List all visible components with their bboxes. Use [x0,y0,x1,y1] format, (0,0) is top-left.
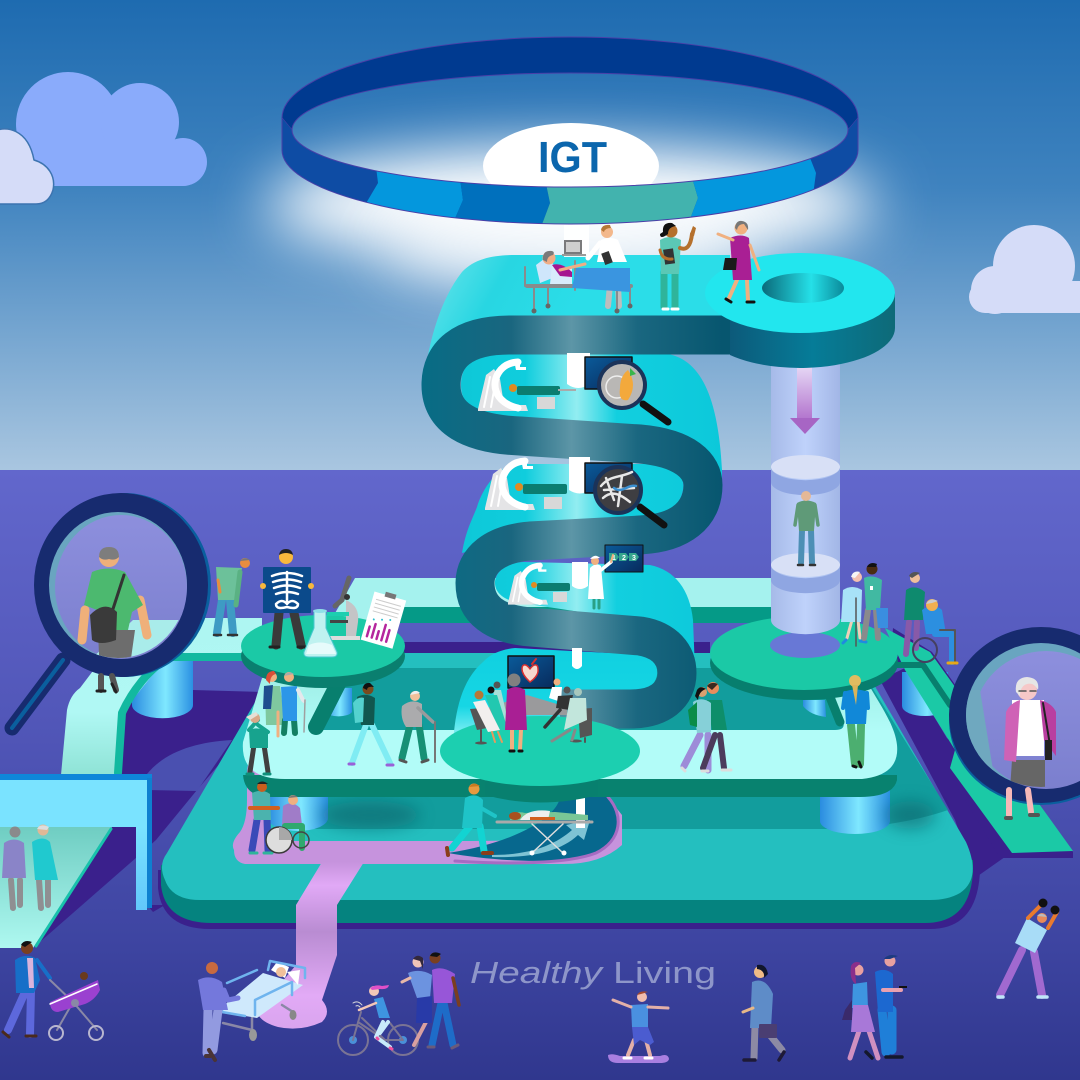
floor level 2 [462,464,683,553]
ramp [0,827,112,948]
man with chest x-ray [260,549,314,647]
right ramp walkway [885,628,1073,858]
girl on bicycle [338,985,418,1055]
nurse running with stretcher [447,784,592,856]
elevator tube [771,355,840,634]
elevator opening [762,273,844,303]
bent man with back pain [214,558,250,635]
carer with elderly woman [841,563,888,646]
doctor pointing at monitor [588,555,613,608]
left disc platform [241,615,405,688]
arrow down [790,418,820,434]
base platform [161,653,973,923]
IGT label: IGT [538,133,607,182]
elderly man with cane [400,691,435,762]
left lens with man [34,493,211,680]
wheelchair man [913,599,957,664]
ribbon wall [441,335,735,709]
flask [304,609,337,657]
spiral ramp [425,225,735,745]
IGT label [483,123,659,209]
ring front band with chevrons [282,118,858,224]
gate frame [0,774,152,780]
carer [864,563,888,638]
C-arm scanner level 1 [478,360,576,411]
doctor [588,225,627,306]
monitor with numbered steps: 1 [612,555,616,562]
monitor with numbered steps: 3 [632,555,636,562]
Healthy Living text [470,955,716,990]
lighter ground patch [147,740,232,791]
stroller [49,972,103,1040]
cloud: upper left large [15,72,207,186]
floor level 1 [461,353,722,490]
clipboard with chart [361,589,407,649]
dark teal arrival area [448,797,618,861]
wheelchair patient [266,795,309,853]
blonde woman from behind [843,675,868,767]
purple horizontal route [233,738,622,864]
boy on skateboard [608,991,669,1063]
elderly woman [841,572,866,646]
back walkway strip [330,578,780,623]
ring back band [282,37,858,130]
light beams [564,225,590,669]
monitor and magnifier level 1 [585,357,668,422]
couple with phone [402,952,459,1048]
column: lower right [820,790,890,834]
arrow on floor [492,820,590,857]
meeting table group [470,674,592,751]
sheet [572,268,630,292]
left bridge with column [61,618,262,775]
lower purple route to bed [257,862,364,1029]
monitor [562,240,586,290]
left lens man's legs below lens [97,676,116,692]
seated clinicians right [545,678,587,741]
cloud: right [969,225,1080,314]
man pushing hospital bed [198,961,305,1060]
glow around ring [265,147,875,285]
column: lower left [268,795,328,831]
C-arm scanner level 3 [508,564,570,605]
nurse [250,782,278,853]
nurse pushing wheelchair right [904,572,957,664]
Healthy Living text: Healthy [470,955,605,990]
top platform surface [425,255,730,372]
meeting monitor with heart [508,656,554,688]
table [487,695,567,715]
elderly couple with cane [263,671,305,736]
column: right ramp [902,672,948,716]
older couple walking through gate [2,824,58,908]
beam [576,798,585,828]
column: bridge [132,660,193,718]
stretcher [497,810,592,856]
Healthy Living text: Living [613,955,716,990]
crouching man holding head [246,712,270,774]
woman [263,671,285,736]
background ground [0,470,1080,1080]
gate over left ramp [0,774,152,948]
nurse with tablet [660,223,696,309]
C-arm scanner level 2 [485,459,567,510]
upper tier walkway [243,675,897,797]
nurse pushing wheelchair [250,782,309,853]
platform ring [705,253,895,368]
standing presenter [505,674,527,751]
background sky [0,0,1080,470]
IGT ring [280,37,860,235]
walking couple [682,682,731,771]
purple route, stretcher loop [233,738,622,864]
couple looking at phone [842,955,907,1058]
bed frame [525,267,632,314]
patient [536,251,585,284]
monitor with numbered steps [605,545,643,572]
right lens woman legs [1006,790,1038,818]
man inside elevator [795,491,818,565]
cloud: upper left small [0,129,54,204]
monitor with numbered steps: 2 [622,555,626,562]
column: under right disc [803,700,826,717]
woman in magenta dress [718,221,759,302]
left magnifier handle [12,660,63,728]
seated clinicians left [473,682,510,742]
man [281,672,305,733]
chairs [470,708,592,744]
bottom disc platform [440,716,640,802]
inner shaded floor [300,668,948,829]
right disc platform [710,616,898,700]
father with stroller [3,941,103,1040]
bed [222,961,305,1041]
floor level 3 [495,562,695,670]
walking young man with backpack [349,683,393,765]
dark shadow beneath the platforms [33,642,1012,948]
patient bed with doctor [525,225,632,314]
right magnifier [949,627,1080,805]
column: under left disc [325,688,352,716]
wifi symbol [353,1002,362,1007]
woman exercising with kettlebells [998,898,1060,997]
microscope [327,578,360,640]
businessman with briefcase [743,965,784,1060]
floor shadows [320,801,935,829]
monitor and magnifier level 2 [585,463,664,525]
floor level 4 [453,648,657,745]
